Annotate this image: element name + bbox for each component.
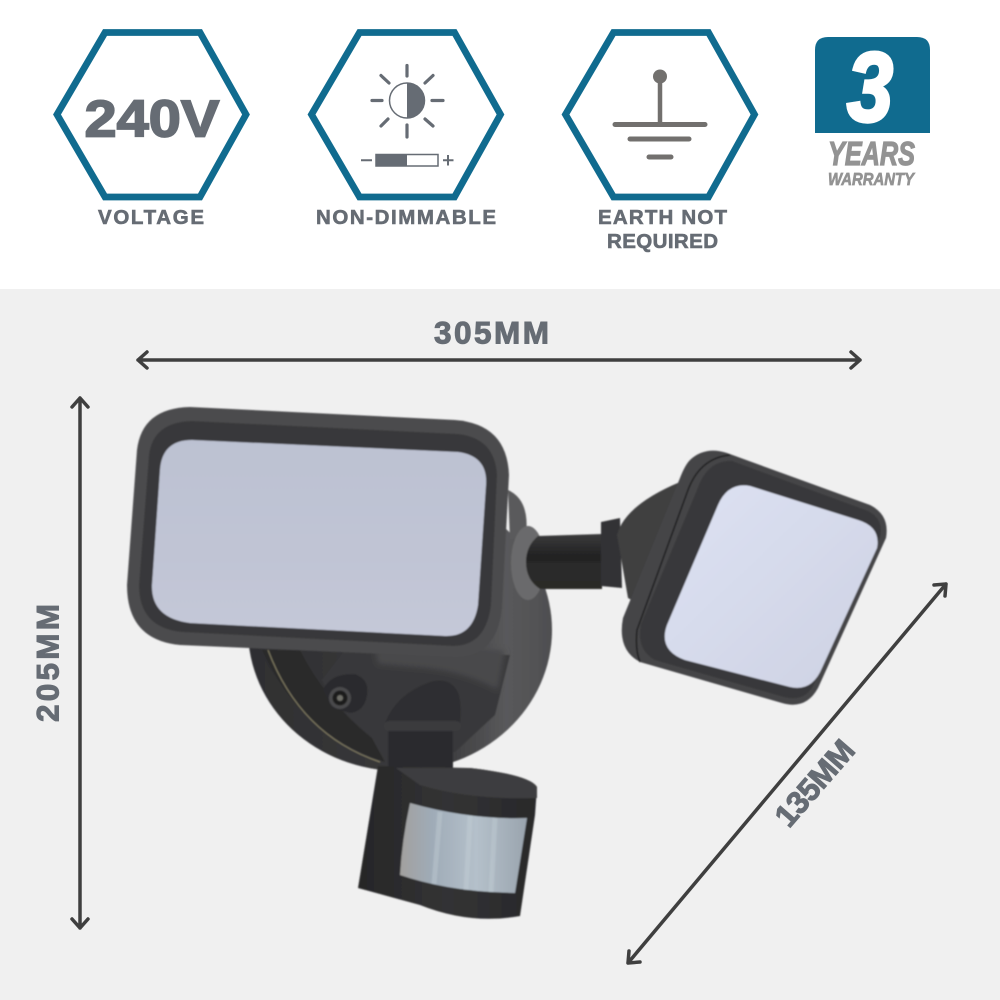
warranty word: WARRANTY (828, 169, 915, 189)
warranty years: YEARS (828, 135, 915, 172)
width value: 305MM (434, 314, 549, 350)
badge: 3 years warranty (815, 32, 930, 189)
right head shell (617, 482, 680, 610)
arrow: depth (628, 584, 946, 963)
dimension: width (138, 314, 860, 368)
arrow: height (72, 398, 88, 928)
product: twin head security light (127, 407, 887, 919)
arm (511, 518, 622, 600)
icon: brightness slider (361, 154, 454, 166)
icon: earth hexagon (566, 32, 754, 197)
badge: non-dimmable (312, 32, 500, 229)
badge: earth not required (566, 32, 754, 253)
icon: voltage hexagon (57, 32, 246, 197)
required label: REQUIRED (607, 230, 718, 253)
badge: voltage (57, 32, 246, 229)
voltage value: 240V (84, 90, 220, 148)
earth label: EARTH NOT (598, 206, 727, 229)
plate boss (508, 490, 527, 540)
motion sensor neck (384, 681, 461, 773)
warranty blue tab (815, 37, 930, 133)
voltage label: VOLTAGE (98, 206, 204, 229)
left head (127, 407, 509, 657)
height value: 205MM (30, 604, 66, 722)
wall plate (248, 528, 553, 770)
screw recess (323, 674, 368, 713)
arrow: width (138, 352, 860, 368)
panel: dimensions background (0, 289, 1000, 1000)
warranty number: 3 (847, 32, 893, 142)
non-dimmable label: NON-DIMMABLE (316, 206, 496, 229)
icon: non-dimmable hexagon (312, 32, 500, 197)
dimension: depth (628, 584, 946, 963)
dimension: height (30, 398, 88, 928)
right head (622, 451, 887, 705)
motion sensor body (358, 766, 537, 919)
icon: half sun (372, 66, 443, 137)
depth value: 135MM (767, 732, 862, 834)
icon: earth symbol (615, 70, 705, 157)
